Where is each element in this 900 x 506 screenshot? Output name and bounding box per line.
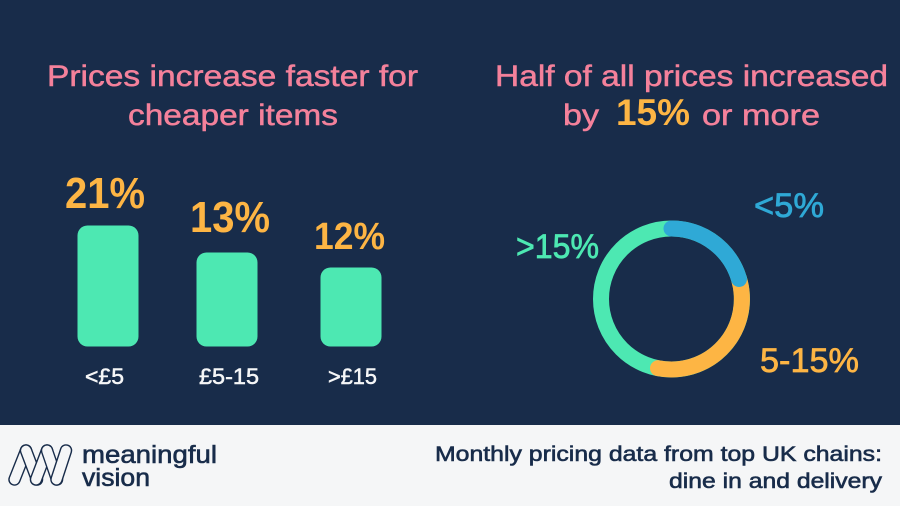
label: under 5 percent: <5% <box>754 187 824 225</box>
wordmark: vision <box>82 464 150 492</box>
heading: half of all prices: Half of all prices increased <box>495 60 888 93</box>
caption: data source <box>435 442 882 493</box>
heading: half of all prices: 15% <box>616 92 690 133</box>
icon: linked loops <box>14 450 66 480</box>
footer band <box>0 425 900 506</box>
bar: under 5 pounds: 21% <box>65 169 145 218</box>
caption: data source: dine in and delivery <box>669 469 882 493</box>
bar: 5 to 15 pounds <box>190 193 270 389</box>
segment: under 5 percent <box>672 228 739 279</box>
label: 5 to 15 percent: 5-15% <box>760 342 859 380</box>
segment: 5 to 15 percent <box>658 279 742 369</box>
heading: half of all prices: by <box>563 99 599 132</box>
logo: meaningful vision <box>14 441 217 492</box>
heading: prices increase faster: cheaper items <box>128 99 338 132</box>
donut chart: share of price increases <box>601 228 742 370</box>
wordmark <box>82 441 217 492</box>
heading: half of all prices: or more <box>702 99 820 132</box>
bar: under 5 pounds: <£5 <box>85 364 124 389</box>
bar chart: price rise by item cost <box>65 169 385 389</box>
wordmark: meaningful <box>82 441 217 469</box>
bar: over 15 pounds: 12% <box>314 216 385 258</box>
label: over 15 percent: >15% <box>516 228 599 266</box>
heading: prices increase faster <box>47 60 418 132</box>
bar: over 15 pounds <box>314 216 385 389</box>
bar: under 5 pounds <box>65 169 145 389</box>
segment: over 15 percent <box>601 228 742 370</box>
caption: data source: Monthly pricing data from top UK chains: <box>435 442 882 466</box>
bar: 5 to 15 pounds: 13% <box>190 193 270 242</box>
heading: half of all prices <box>495 60 888 133</box>
bar: over 15 pounds: >£15 <box>328 364 377 389</box>
heading: prices increase faster: Prices increase faster for <box>47 60 418 93</box>
bar: 5 to 15 pounds: £5-15 <box>199 364 259 389</box>
